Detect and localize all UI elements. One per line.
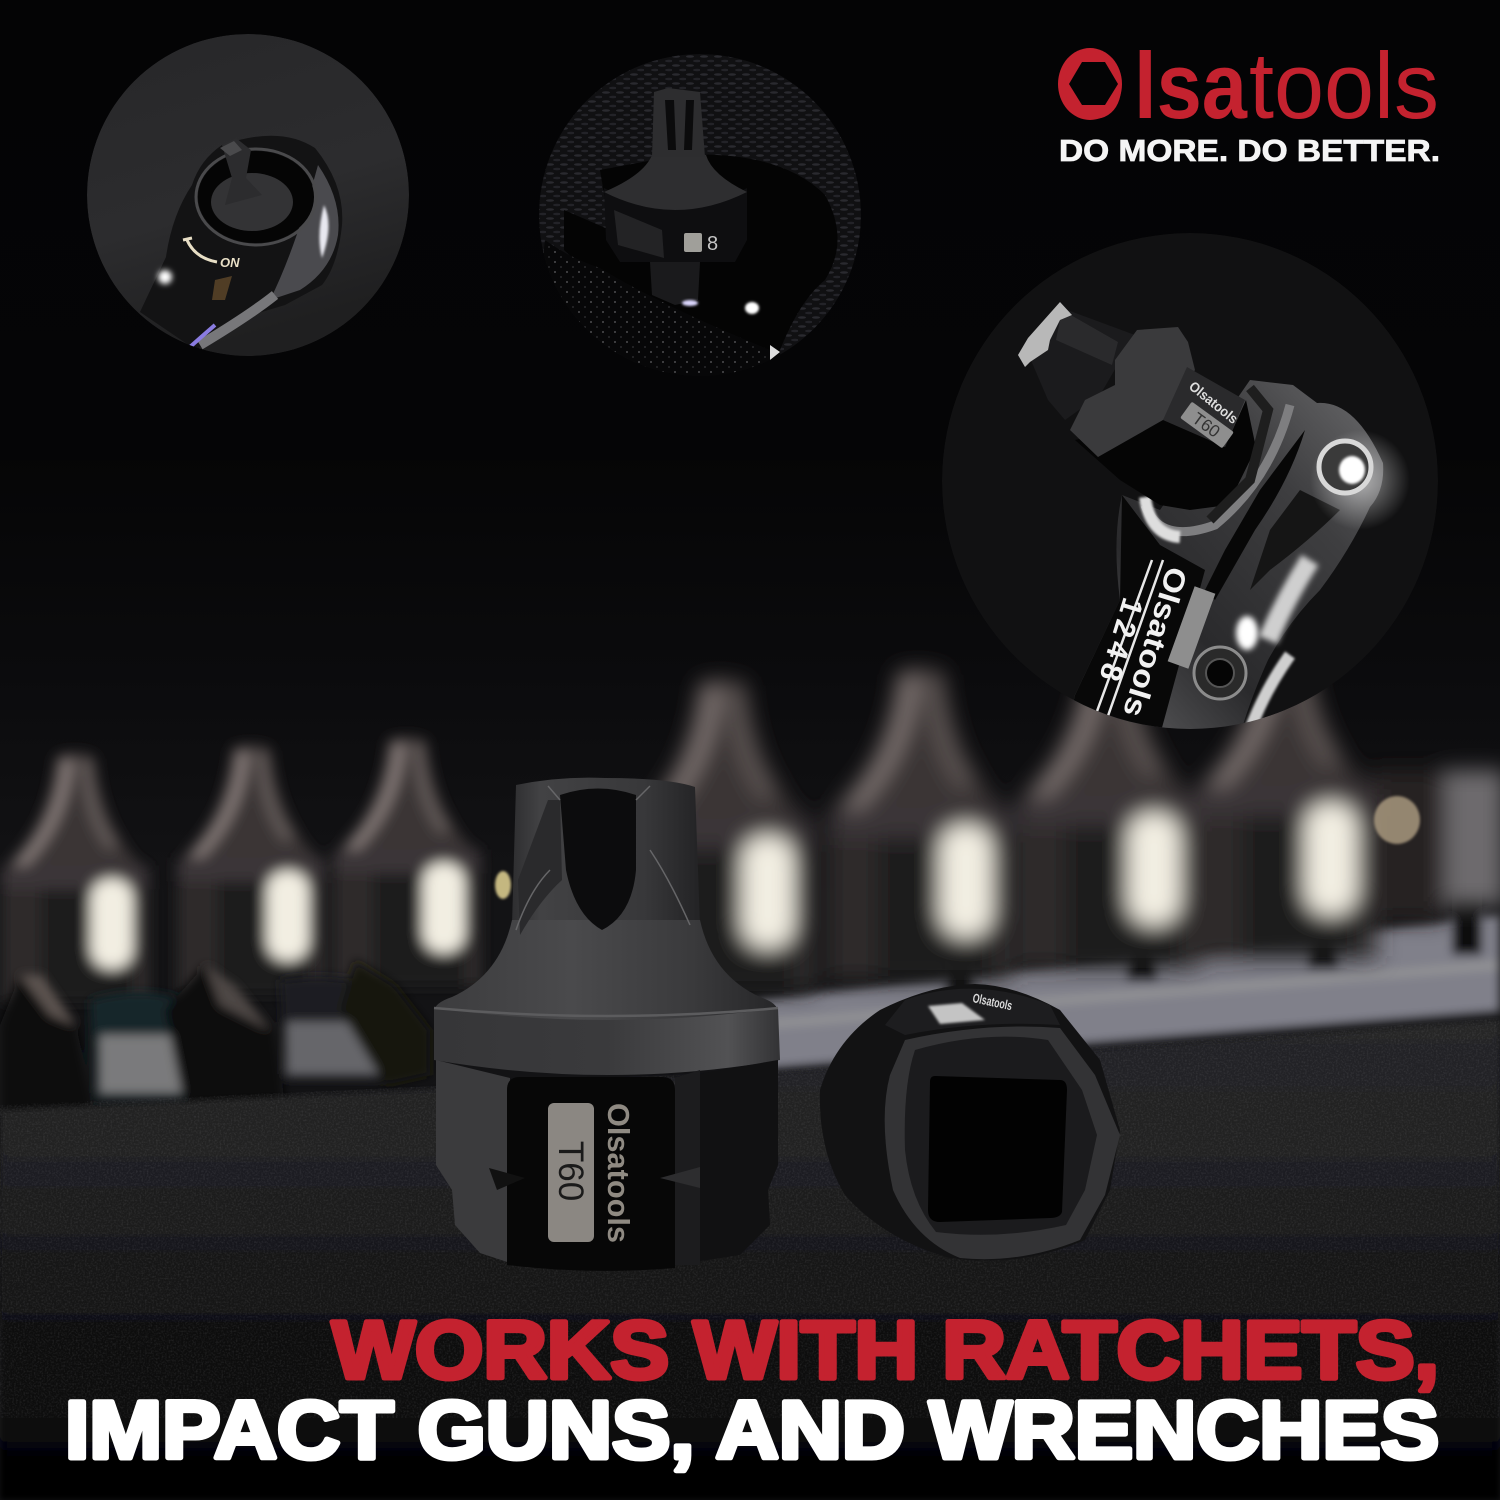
tag: [1180, 402, 1234, 448]
purple edge highlight: [190, 325, 215, 347]
table surface: [0, 1018, 1500, 1500]
chrome highlights: [158, 270, 172, 284]
cone: [211, 173, 293, 231]
blurred bases left: [0, 960, 430, 1115]
blurred sockets left side: [1, 737, 481, 1003]
blurred rail: [756, 890, 1500, 1070]
size 8: 8: [707, 233, 718, 255]
hex screw: [1194, 647, 1246, 699]
ratchet body: [140, 136, 342, 350]
right flat: [675, 1060, 778, 1265]
socket ratchet seat: [1210, 388, 1268, 520]
tag: [684, 233, 702, 252]
square drive hole: [928, 1076, 1067, 1222]
tag on lying socket: [928, 1003, 985, 1024]
blurred sockets right side: [630, 645, 1500, 991]
textile: [539, 54, 861, 376]
socket cone: [604, 155, 747, 210]
headline line 1: WORKS WITH RATCHETS,: [332, 1305, 1439, 1396]
collar band: [434, 1008, 780, 1075]
dark speckled reflection: [1205, 430, 1305, 600]
logo wordmark: [1058, 33, 1439, 138]
blurred row of sockets on rail: [0, 645, 1500, 1115]
logo ring O base: [1058, 48, 1122, 120]
eye: [1319, 441, 1371, 493]
black stem: [1065, 495, 1205, 735]
cone: [1070, 327, 1195, 457]
socket shaft under body: [650, 262, 700, 305]
outer body: [820, 984, 1120, 1261]
shoulder: [434, 920, 778, 1025]
brand logo: [1058, 33, 1440, 168]
headline: [65, 1305, 1439, 1476]
logo wordmark: O: [1062, 33, 1125, 138]
chrome collar: [1145, 405, 1290, 532]
silver size tag: [548, 1103, 594, 1242]
circle: T60 on flex wrench: [942, 233, 1438, 735]
headline line 2: IMPACT GUNS, AND WRENCHES: [65, 1385, 1439, 1476]
torx tip: [652, 88, 705, 157]
leather: [544, 240, 766, 373]
outer ring: [198, 151, 314, 243]
socket logo: Olsatools: [601, 1103, 636, 1243]
chrome wrench: [1065, 380, 1410, 735]
chrome side: [270, 165, 339, 300]
logo wordmark: lsa: [1134, 33, 1248, 138]
end face: [885, 1026, 1120, 1259]
socket: lying, showing square drive: [820, 984, 1120, 1261]
size on tag: T60: [1189, 409, 1224, 441]
bright bands: [1268, 560, 1310, 640]
socket black body: [1075, 400, 1256, 510]
highlight above screw: [1236, 616, 1258, 650]
highlights: [745, 302, 759, 314]
wrench logo: Olsatools: [1116, 563, 1193, 721]
lens flare glints: [495, 796, 1420, 899]
tagline: DO MORE. DO BETTER.: [1059, 133, 1440, 168]
size label T60: T60: [551, 1141, 590, 1201]
circle: ratchet top view: [87, 34, 409, 356]
wrench numbers: 1248: [1091, 594, 1149, 690]
top face: [885, 989, 1060, 1035]
torx bit shaft: [1030, 308, 1135, 420]
socket logo: Olsatools: [1186, 378, 1241, 427]
direction arrow: [183, 238, 217, 262]
ring lines on stem: [1096, 560, 1164, 716]
label band: [1163, 367, 1245, 447]
circle: socket on ratchet on leather: [539, 54, 861, 380]
socket: foreground T60: [434, 778, 780, 1271]
socket body: [604, 188, 747, 262]
torx grooves: [560, 788, 636, 930]
flat recess: [507, 1077, 675, 1271]
logo on lying socket: Olsatools: [971, 990, 1014, 1013]
ON marking: ON: [220, 255, 240, 270]
torx tip: [512, 778, 700, 925]
left flat: [436, 1060, 510, 1263]
logo wordmark: tools: [1249, 33, 1439, 138]
eye glow: [1314, 434, 1407, 526]
notches: [489, 1168, 525, 1190]
torx tip end: [1018, 302, 1072, 367]
black ratchet: [564, 154, 838, 376]
wrench base: [1065, 380, 1383, 735]
